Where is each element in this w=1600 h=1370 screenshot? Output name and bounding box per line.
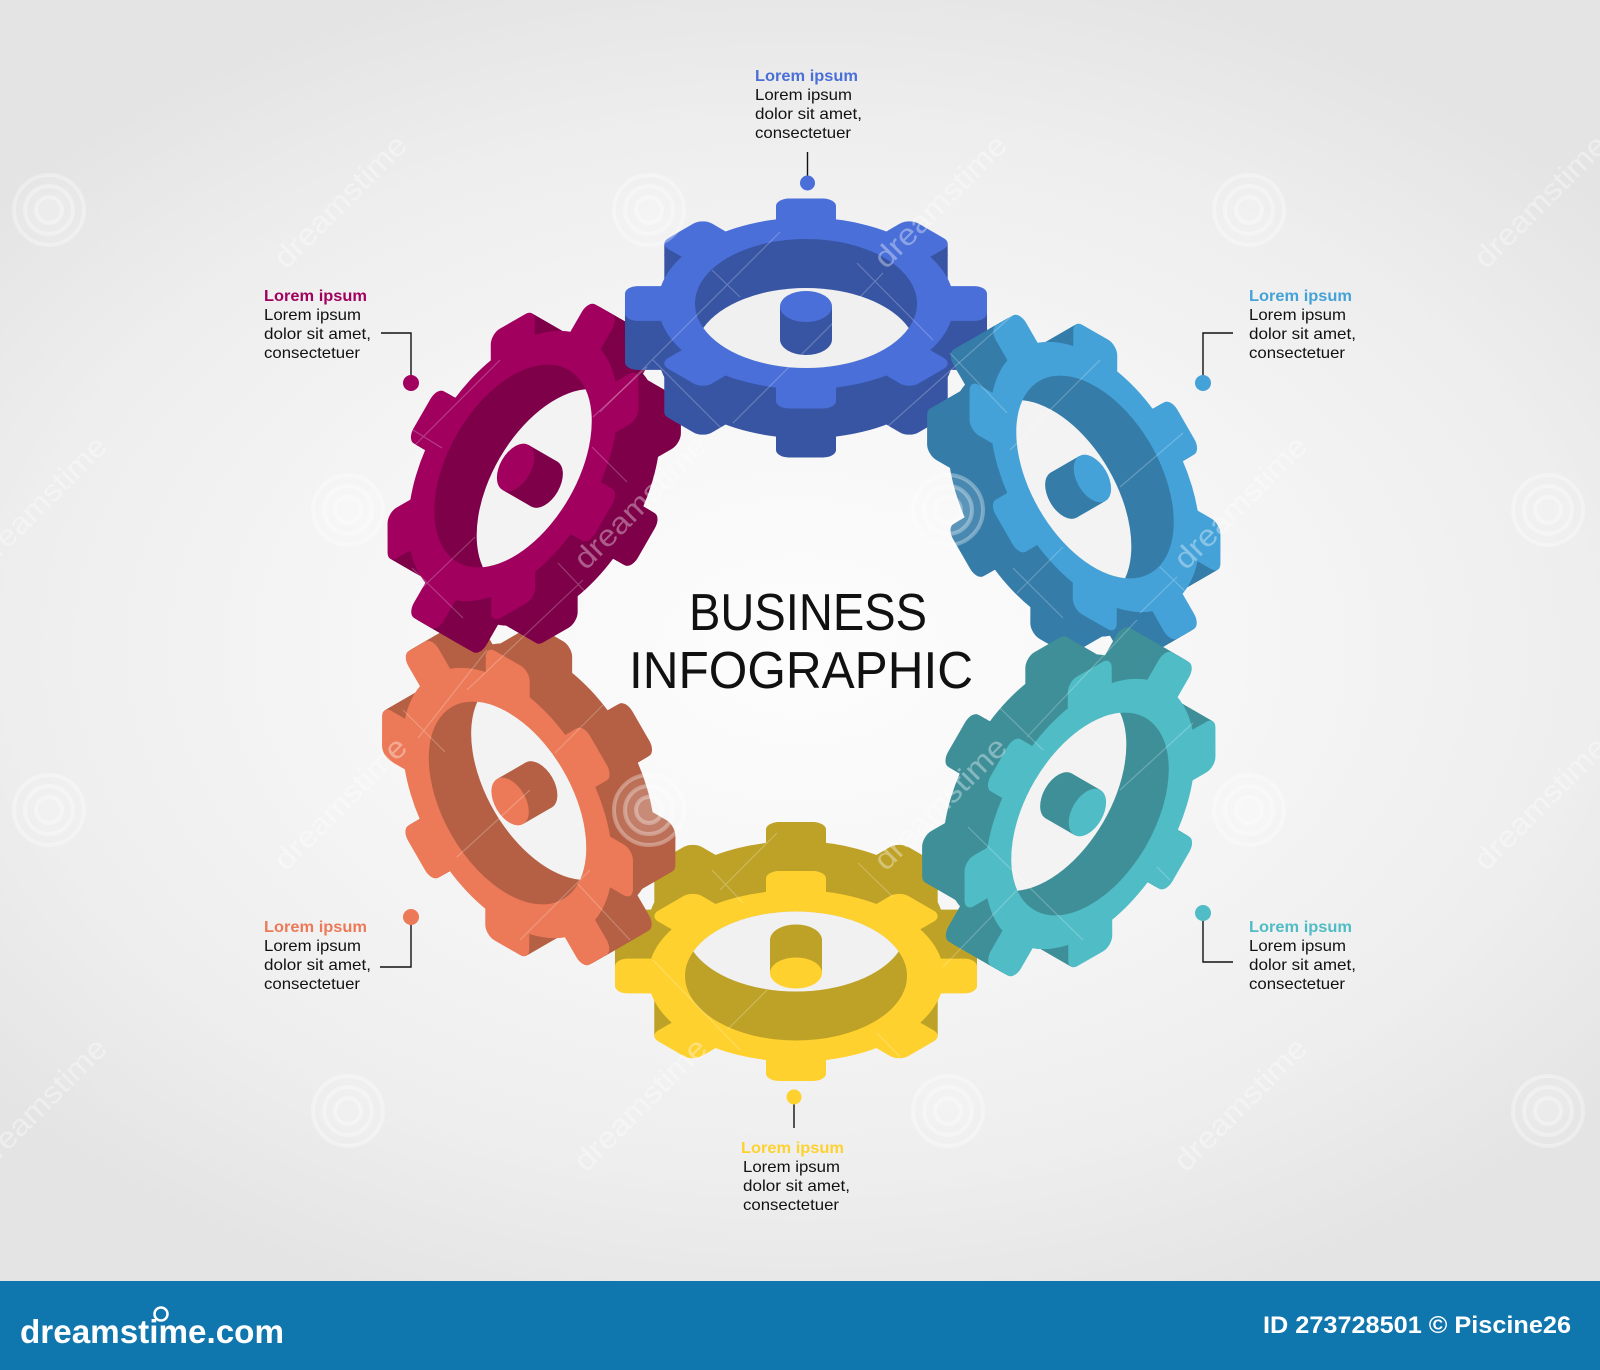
callout text: Lorem ipsum bbox=[755, 87, 852, 104]
callout text: consectetuer bbox=[743, 1197, 840, 1214]
callout text: dolor sit amet, bbox=[1249, 957, 1356, 974]
watermark: dreamstime text: dreamstime bbox=[1468, 731, 1600, 877]
callout text: dolor sit amet, bbox=[755, 106, 862, 123]
watermark: dreamstime text bbox=[0, 129, 1600, 1178]
footer logo: dreamstime.com bbox=[20, 1313, 284, 1350]
callout text: Lorem ipsum bbox=[755, 68, 858, 85]
watermark: dreamstime text: dreamstime bbox=[1168, 430, 1314, 576]
axle bbox=[780, 291, 832, 355]
callout text bbox=[1249, 919, 1356, 993]
image id: ID 273728501 © Piscine26 bbox=[1263, 1312, 1571, 1339]
gear: blue bbox=[625, 199, 987, 457]
callout text: Lorem ipsum bbox=[264, 288, 367, 305]
callout text: Lorem ipsum bbox=[1249, 938, 1346, 955]
title bbox=[629, 584, 973, 700]
callout text: Lorem ipsum bbox=[264, 919, 367, 936]
watermark: dreamstime text: dreamstime bbox=[1468, 129, 1600, 275]
connector bbox=[1203, 920, 1233, 962]
hole bbox=[988, 380, 1160, 598]
hole bbox=[983, 693, 1155, 911]
gear side bbox=[625, 200, 987, 457]
watermark: dreamstime text: dreamstime bbox=[268, 731, 414, 877]
inner wall bbox=[396, 675, 619, 931]
callout text: Lorem ipsum bbox=[264, 307, 361, 324]
axle bbox=[770, 924, 822, 988]
gear side bbox=[871, 268, 1276, 711]
gear: light blue bbox=[871, 268, 1276, 711]
watermark: dreamstime text: dreamstime bbox=[868, 731, 1014, 877]
axle bbox=[1037, 448, 1119, 525]
callout text bbox=[264, 288, 371, 362]
connector bbox=[793, 1104, 795, 1128]
title: INFOGRAPHIC bbox=[629, 642, 973, 700]
watermark: dreamstime text: dreamstime bbox=[868, 129, 1014, 275]
callout text: dolor sit amet, bbox=[1249, 326, 1356, 343]
watermark: dreamstime text: dreamstime bbox=[568, 430, 714, 576]
watermark: hairlines bbox=[403, 232, 1193, 1057]
gear: coral bbox=[326, 569, 731, 1012]
callout: coral bbox=[264, 909, 419, 993]
callout: yellow bbox=[741, 1090, 850, 1214]
gear face bbox=[914, 268, 1276, 686]
callout text bbox=[755, 68, 862, 142]
gear side bbox=[866, 580, 1271, 1023]
callout text bbox=[741, 1140, 850, 1214]
callout text: Lorem ipsum bbox=[743, 1159, 840, 1176]
callout text bbox=[264, 919, 371, 993]
watermark: spirals bbox=[14, 175, 1583, 1146]
connector bbox=[381, 333, 411, 376]
callout: light blue bbox=[1195, 288, 1356, 391]
callout text: dolor sit amet, bbox=[743, 1178, 850, 1195]
footer band bbox=[0, 1281, 1600, 1370]
callout: blue bbox=[755, 68, 862, 190]
axle bbox=[489, 437, 571, 514]
inner wall bbox=[685, 912, 907, 1040]
callout text: Lorem ipsum bbox=[1249, 288, 1352, 305]
marker dot bbox=[800, 176, 815, 190]
callout text: consectetuer bbox=[755, 125, 852, 142]
gear: teal bbox=[866, 580, 1271, 1023]
marker dot bbox=[1195, 375, 1211, 391]
gear face bbox=[332, 257, 694, 675]
gear side bbox=[615, 822, 977, 1080]
inner wall bbox=[402, 338, 624, 594]
marker dot bbox=[403, 375, 419, 391]
callout text: consectetuer bbox=[1249, 345, 1346, 362]
gear face bbox=[625, 199, 987, 408]
callout: teal bbox=[1195, 905, 1356, 993]
watermark: dreamstime text: dreamstime bbox=[568, 1032, 714, 1178]
marker dot bbox=[786, 1090, 802, 1104]
callout text: consectetuer bbox=[1249, 976, 1346, 993]
marker dot bbox=[1195, 905, 1211, 921]
connector bbox=[1203, 333, 1233, 376]
inner wall bbox=[984, 349, 1206, 605]
title: BUSINESS bbox=[689, 584, 927, 642]
hole bbox=[693, 911, 899, 992]
gear side bbox=[332, 257, 737, 700]
gear face bbox=[326, 594, 689, 1012]
gear: purple bbox=[332, 257, 737, 700]
connector bbox=[806, 152, 808, 176]
gear: yellow bbox=[615, 822, 977, 1081]
hole bbox=[448, 369, 620, 587]
callout text: Lorem ipsum bbox=[1249, 919, 1352, 936]
axle bbox=[484, 755, 565, 832]
inner wall bbox=[695, 239, 917, 368]
callout text bbox=[1249, 288, 1356, 362]
callout text: consectetuer bbox=[264, 345, 361, 362]
watermark: dreamstime text: dreamstime bbox=[1168, 1032, 1314, 1178]
callout text: dolor sit amet, bbox=[264, 326, 371, 343]
callout text: Lorem ipsum bbox=[1249, 307, 1346, 324]
inner wall bbox=[979, 686, 1201, 942]
marker dot bbox=[403, 909, 419, 925]
axle bbox=[1032, 766, 1114, 843]
callout: purple bbox=[264, 288, 419, 391]
callout text: consectetuer bbox=[264, 976, 361, 993]
watermark: dreamstime text: dreamstime bbox=[268, 129, 414, 275]
callout text: Lorem ipsum bbox=[741, 1140, 844, 1157]
gear face bbox=[615, 871, 977, 1081]
callout text: dolor sit amet, bbox=[264, 957, 371, 974]
hole bbox=[443, 682, 615, 900]
gear side bbox=[327, 569, 731, 1012]
gear face bbox=[909, 605, 1271, 1023]
callout text: Lorem ipsum bbox=[264, 938, 361, 955]
connector bbox=[380, 924, 411, 967]
hole bbox=[703, 288, 909, 368]
